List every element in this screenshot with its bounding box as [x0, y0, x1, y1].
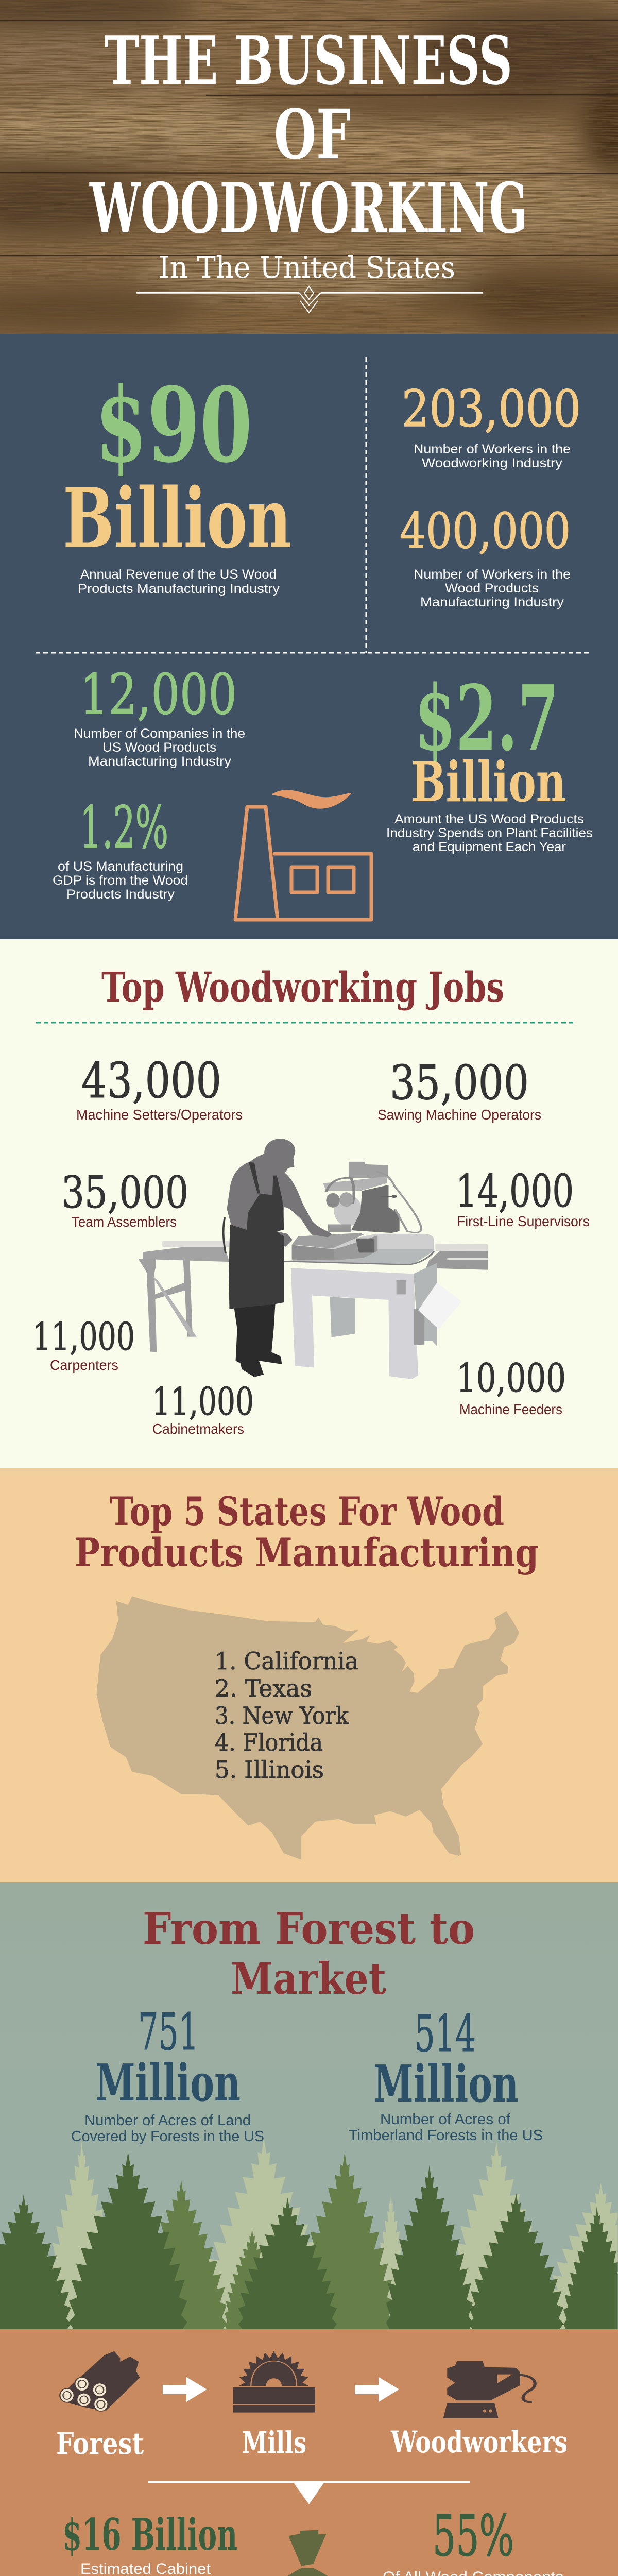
stat: 514 million acres — [349, 2005, 543, 2144]
job: cabinetmakers: 11,000 — [152, 1380, 254, 1424]
heading — [143, 1903, 475, 2004]
panel: top woodworking jobs — [0, 939, 618, 1468]
illustration: tree line — [0, 2139, 618, 2329]
stat: 2.7 billion spend: Industry Spends on Plant Facilities — [386, 826, 593, 840]
stat: 514 million acres: 514 — [415, 2005, 476, 2063]
arrow — [163, 2377, 207, 2402]
icon: sander — [443, 2361, 535, 2418]
job: team assemblers: 35,000 — [61, 1167, 188, 1218]
stat: 1.2 percent of GDP: GDP is from the Wood — [53, 873, 188, 888]
stat: 2.7 billion spend: Amount the US Wood Products — [394, 812, 584, 826]
stat: 203,000 workers: Number of Workers in the — [414, 442, 571, 456]
stat: 12,000 companies — [74, 663, 245, 769]
stat: 55 percent: 55% — [433, 2503, 514, 2569]
stat: 90 billion revenue: Products Manufacturing Industry — [78, 582, 280, 596]
stat: 90 billion revenue: $90 — [95, 365, 252, 485]
stat: 400,000 workers: Wood Products — [445, 581, 539, 596]
job: machine setters: Machine Setters/Operators — [76, 1107, 243, 1123]
job: first-line supervisors: First-Line Supervisors — [457, 1213, 590, 1229]
job: cabinetmakers — [152, 1380, 254, 1437]
wood plank shading — [0, 0, 618, 334]
plank seams — [0, 20, 618, 256]
heading: From Forest to — [143, 1903, 475, 1954]
icon: factory — [235, 790, 371, 920]
map: United States — [96, 1596, 519, 1862]
stat: 400,000 workers: Number of Workers in the — [414, 567, 571, 582]
job: first-line supervisors: 14,000 — [456, 1165, 574, 1217]
job: carpenters — [32, 1315, 135, 1373]
stat: 751 million acres: Million — [95, 2054, 241, 2113]
heading: Top Woodworking Jobs — [101, 963, 504, 1011]
stat: 1.2 percent of GDP: Products Industry — [66, 887, 175, 902]
stat: 400,000 workers: 400,000 — [400, 503, 571, 560]
heading: Products Manufacturing — [75, 1530, 539, 1575]
stat: 2.7 billion spend — [386, 666, 593, 854]
stat: 90 billion revenue: Billion — [63, 470, 291, 567]
stat: 514 million acres: Timberland Forests in the US — [349, 2127, 543, 2144]
job: carpenters: 11,000 — [32, 1315, 135, 1359]
stat: 16 billion cabinets — [62, 2509, 237, 2576]
label: mills: Mills — [242, 2425, 306, 2460]
job: cabinetmakers: Cabinetmakers — [152, 1421, 244, 1437]
heading: Top 5 States For Wood — [110, 1488, 504, 1534]
job: sawing machine operators: 35,000 — [390, 1055, 529, 1110]
dashed dividers — [36, 357, 589, 653]
stat: 1.2 percent of GDP: 1.2% — [80, 794, 168, 861]
stat: 12,000 companies: US Wood Products — [102, 740, 216, 755]
stat: 12,000 companies: Manufacturing Industry — [88, 754, 232, 769]
arrow — [355, 2377, 399, 2402]
stat: 16 billion cabinets: $16 Billion — [62, 2509, 237, 2560]
list of states: 3. New York — [215, 1702, 349, 1730]
panel: top 5 states — [0, 1468, 618, 1882]
panel: supply chain and sales — [0, 2329, 618, 2576]
job: machine feeders: Machine Feeders — [459, 1401, 562, 1417]
icon: logs — [60, 2351, 140, 2411]
list of states: 5. Illinois — [215, 1756, 324, 1784]
icon: saw blade — [233, 2351, 315, 2413]
title — [89, 21, 528, 249]
stat: 751 million acres: Covered by Forests in the US — [71, 2128, 264, 2145]
panel: wood header — [0, 0, 618, 334]
stat: 400,000 workers: Manufacturing Industry — [420, 595, 564, 609]
stat: 203,000 workers: Woodworking Industry — [422, 456, 563, 470]
stat: 90 billion revenue: Annual Revenue of the US Wood — [80, 567, 277, 582]
job: carpenters: Carpenters — [50, 1357, 118, 1373]
stat: 751 million acres — [71, 2003, 264, 2145]
stat: 90 billion revenue — [63, 365, 291, 596]
funnel arrow — [148, 2481, 470, 2504]
stat: 1.2 percent of GDP: of US Manufacturing — [58, 859, 183, 874]
stat: 751 million acres: 751 — [138, 2003, 199, 2062]
stat: 2.7 billion spend: and Equipment Each Year — [413, 840, 566, 854]
label: woodworkers: Woodworkers — [390, 2425, 568, 2460]
heading: Market — [231, 1953, 386, 2004]
stat: 2.7 billion spend: Billion — [411, 750, 566, 815]
stat: 1.2 percent of GDP — [53, 794, 188, 902]
stat: 514 million acres: Million — [373, 2055, 519, 2114]
title: OF — [274, 95, 351, 175]
stat: 514 million acres: Number of Acres of — [380, 2111, 511, 2128]
stat: 751 million acres: Number of Acres of Land — [84, 2112, 251, 2129]
label: forest: Forest — [56, 2426, 144, 2461]
panel: key statistics — [0, 334, 618, 939]
stat: 12,000 companies: 12,000 — [80, 663, 237, 727]
list of states — [215, 1647, 358, 1784]
heading — [75, 1488, 539, 1575]
subtitle: In The United States — [159, 250, 455, 285]
list of states: 1. California — [215, 1647, 358, 1675]
divider with chevrons — [136, 286, 483, 313]
illustration: woodworker at table saw — [138, 1139, 488, 1379]
list of states: 2. Texas — [215, 1674, 312, 1702]
job: machine feeders: 10,000 — [456, 1355, 566, 1401]
stat: 203,000 workers — [402, 380, 581, 470]
panel: from forest to market — [0, 1882, 618, 2329]
stat: 12,000 companies: Number of Companies in the — [74, 726, 245, 741]
icon: money bag — [258, 2530, 358, 2576]
stat: 400,000 workers — [400, 503, 571, 609]
job: sawing machine operators: Sawing Machine Operators — [377, 1107, 541, 1123]
list of states: 4. Florida — [215, 1728, 323, 1756]
job: machine feeders — [456, 1355, 566, 1417]
job: machine setters: 43,000 — [81, 1053, 221, 1109]
job: team assemblers: Team Assemblers — [72, 1214, 177, 1230]
stat: 203,000 workers: 203,000 — [402, 380, 581, 438]
stat: 55 percent — [383, 2503, 563, 2576]
